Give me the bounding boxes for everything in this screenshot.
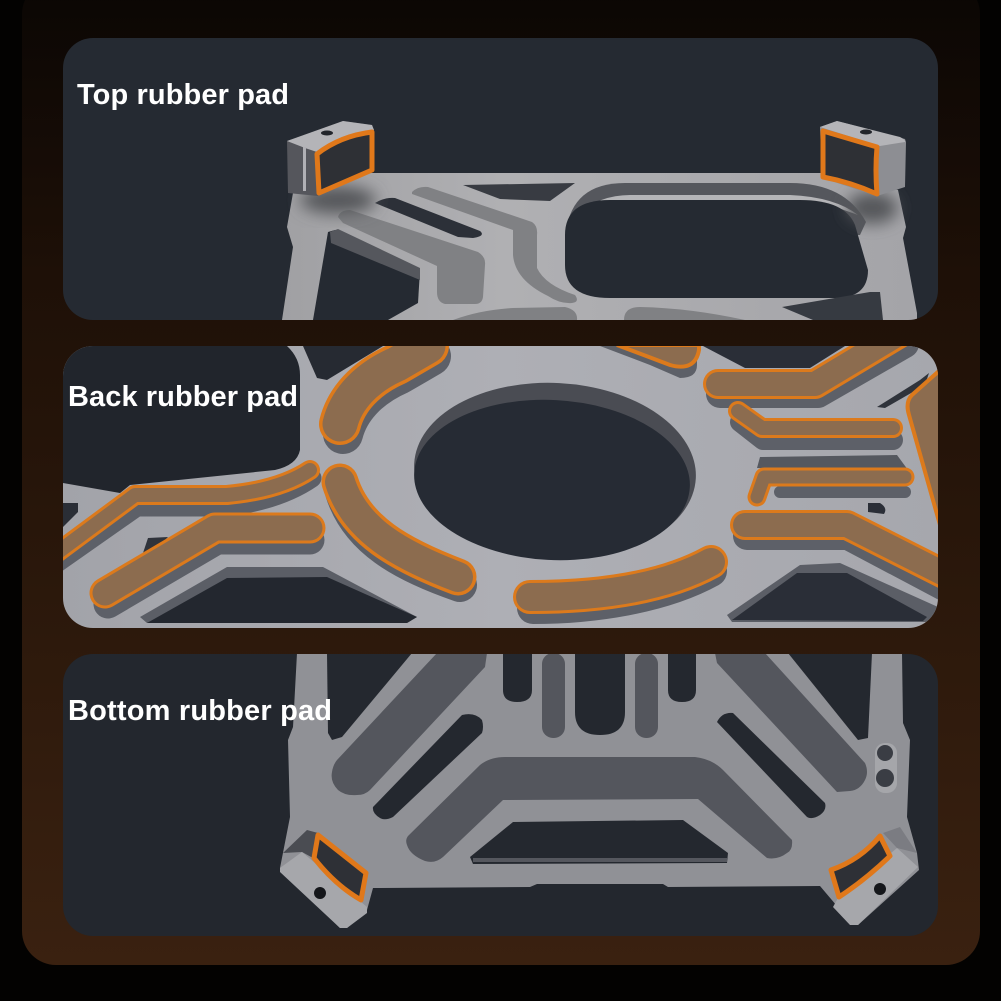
screw slot [875, 743, 897, 793]
bracket shadows [300, 186, 376, 214]
pad: middle right [757, 477, 905, 497]
camera window opening [565, 200, 868, 298]
trapezoid opening [463, 183, 575, 201]
heading: bottom rubber pad: Bottom rubber pad [68, 695, 332, 727]
curved recess [412, 187, 577, 303]
lower left opening [140, 567, 417, 623]
lower right opening [782, 292, 883, 320]
upper right opening [703, 346, 845, 368]
bottom recesses [453, 307, 577, 320]
top-right bracket with rubber pad [820, 121, 906, 196]
bottom-left bracket with rubber pad [280, 830, 367, 928]
frame: bottom metal section [280, 653, 919, 928]
magsafe hole [414, 400, 690, 560]
magsafe ring rim [414, 382, 696, 529]
frame: top metal section [282, 173, 917, 320]
pad: lower left arc [340, 482, 460, 585]
pad: long upper left [50, 470, 312, 568]
openings [327, 653, 872, 864]
top-left bracket with rubber pad [287, 121, 374, 196]
panel: back rubber pad [50, 333, 950, 628]
pad: upper left arc [340, 346, 431, 434]
panel: bottom rubber pad [63, 653, 938, 936]
heading: top rubber pad: Top rubber pad [77, 79, 289, 111]
camera window rim [566, 183, 866, 240]
cutouts: back metal section [63, 346, 938, 623]
lower right opening [727, 563, 938, 622]
pad: upper right long [718, 333, 905, 394]
pad: upper centre [600, 346, 701, 378]
pad: long lower left [105, 528, 310, 604]
pad: lower right long [745, 525, 950, 590]
panel: top rubber pad [63, 38, 938, 320]
pad: lower centre arc [530, 562, 711, 608]
right middle slot [757, 455, 906, 468]
pad: far right [908, 370, 940, 525]
long recess [338, 210, 485, 304]
grey recesses [332, 653, 867, 862]
bottom-right bracket with rubber pad [831, 827, 918, 925]
left opening [313, 230, 420, 320]
pad: upper right short [738, 411, 893, 440]
heading: back rubber pad: Back rubber pad [68, 381, 298, 413]
dark slot [375, 198, 482, 238]
